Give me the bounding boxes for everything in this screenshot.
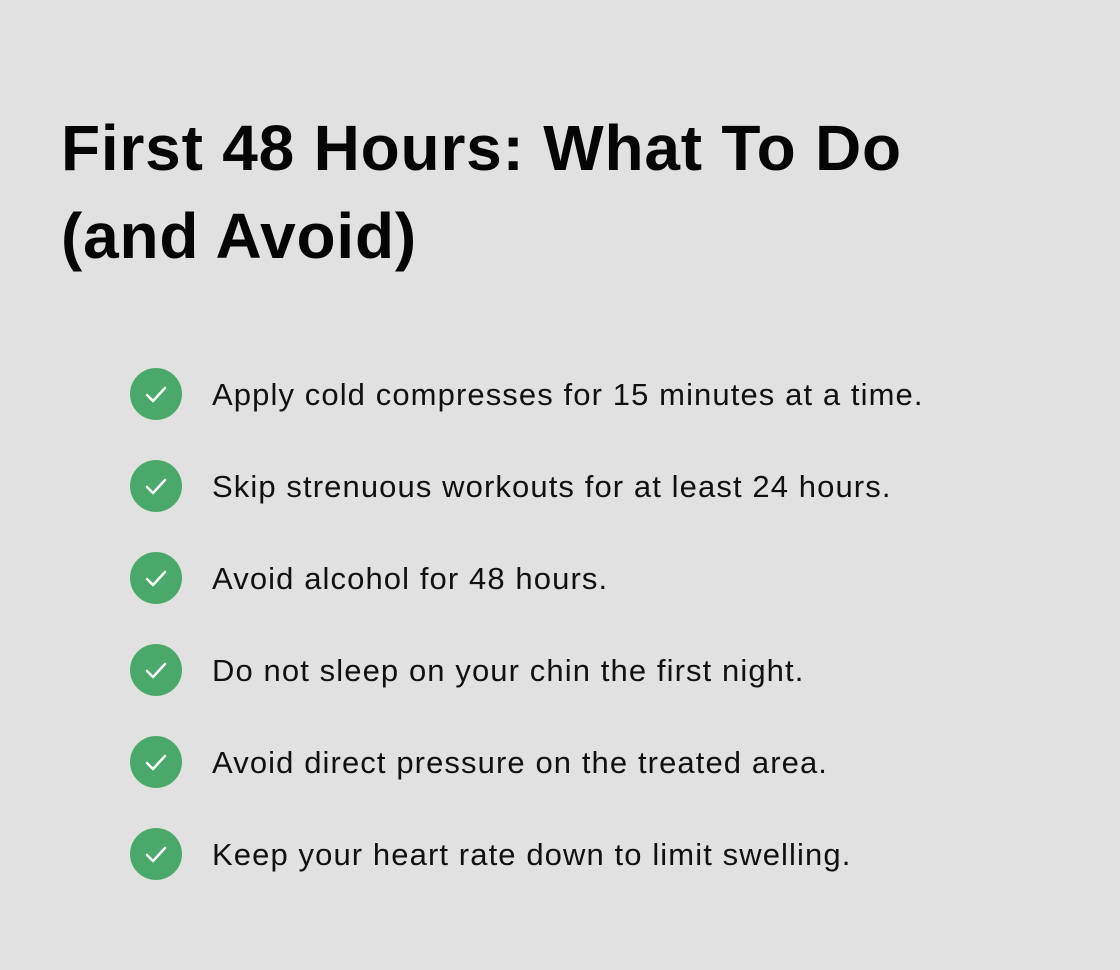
list item 4 [130, 644, 804, 696]
list item 1: Apply cold compresses for 15 minutes at a time. [212, 377, 924, 412]
title [61, 112, 902, 272]
list item 3: Avoid alcohol for 48 hours. [212, 561, 608, 596]
list item 6 [130, 828, 851, 880]
list item 6: Keep your heart rate down to limit swelling. [212, 837, 851, 872]
list item 4: Do not sleep on your chin the first night. [212, 653, 804, 688]
title: First 48 Hours: What To Do [61, 112, 902, 184]
list item 2 [130, 460, 892, 512]
list item 5: Avoid direct pressure on the treated area. [212, 745, 828, 780]
title: (and Avoid) [61, 200, 417, 272]
list item 5 [130, 736, 828, 788]
list item 3 [130, 552, 608, 604]
list item 1 [130, 368, 924, 420]
list item 2: Skip strenuous workouts for at least 24 hours. [212, 469, 892, 504]
